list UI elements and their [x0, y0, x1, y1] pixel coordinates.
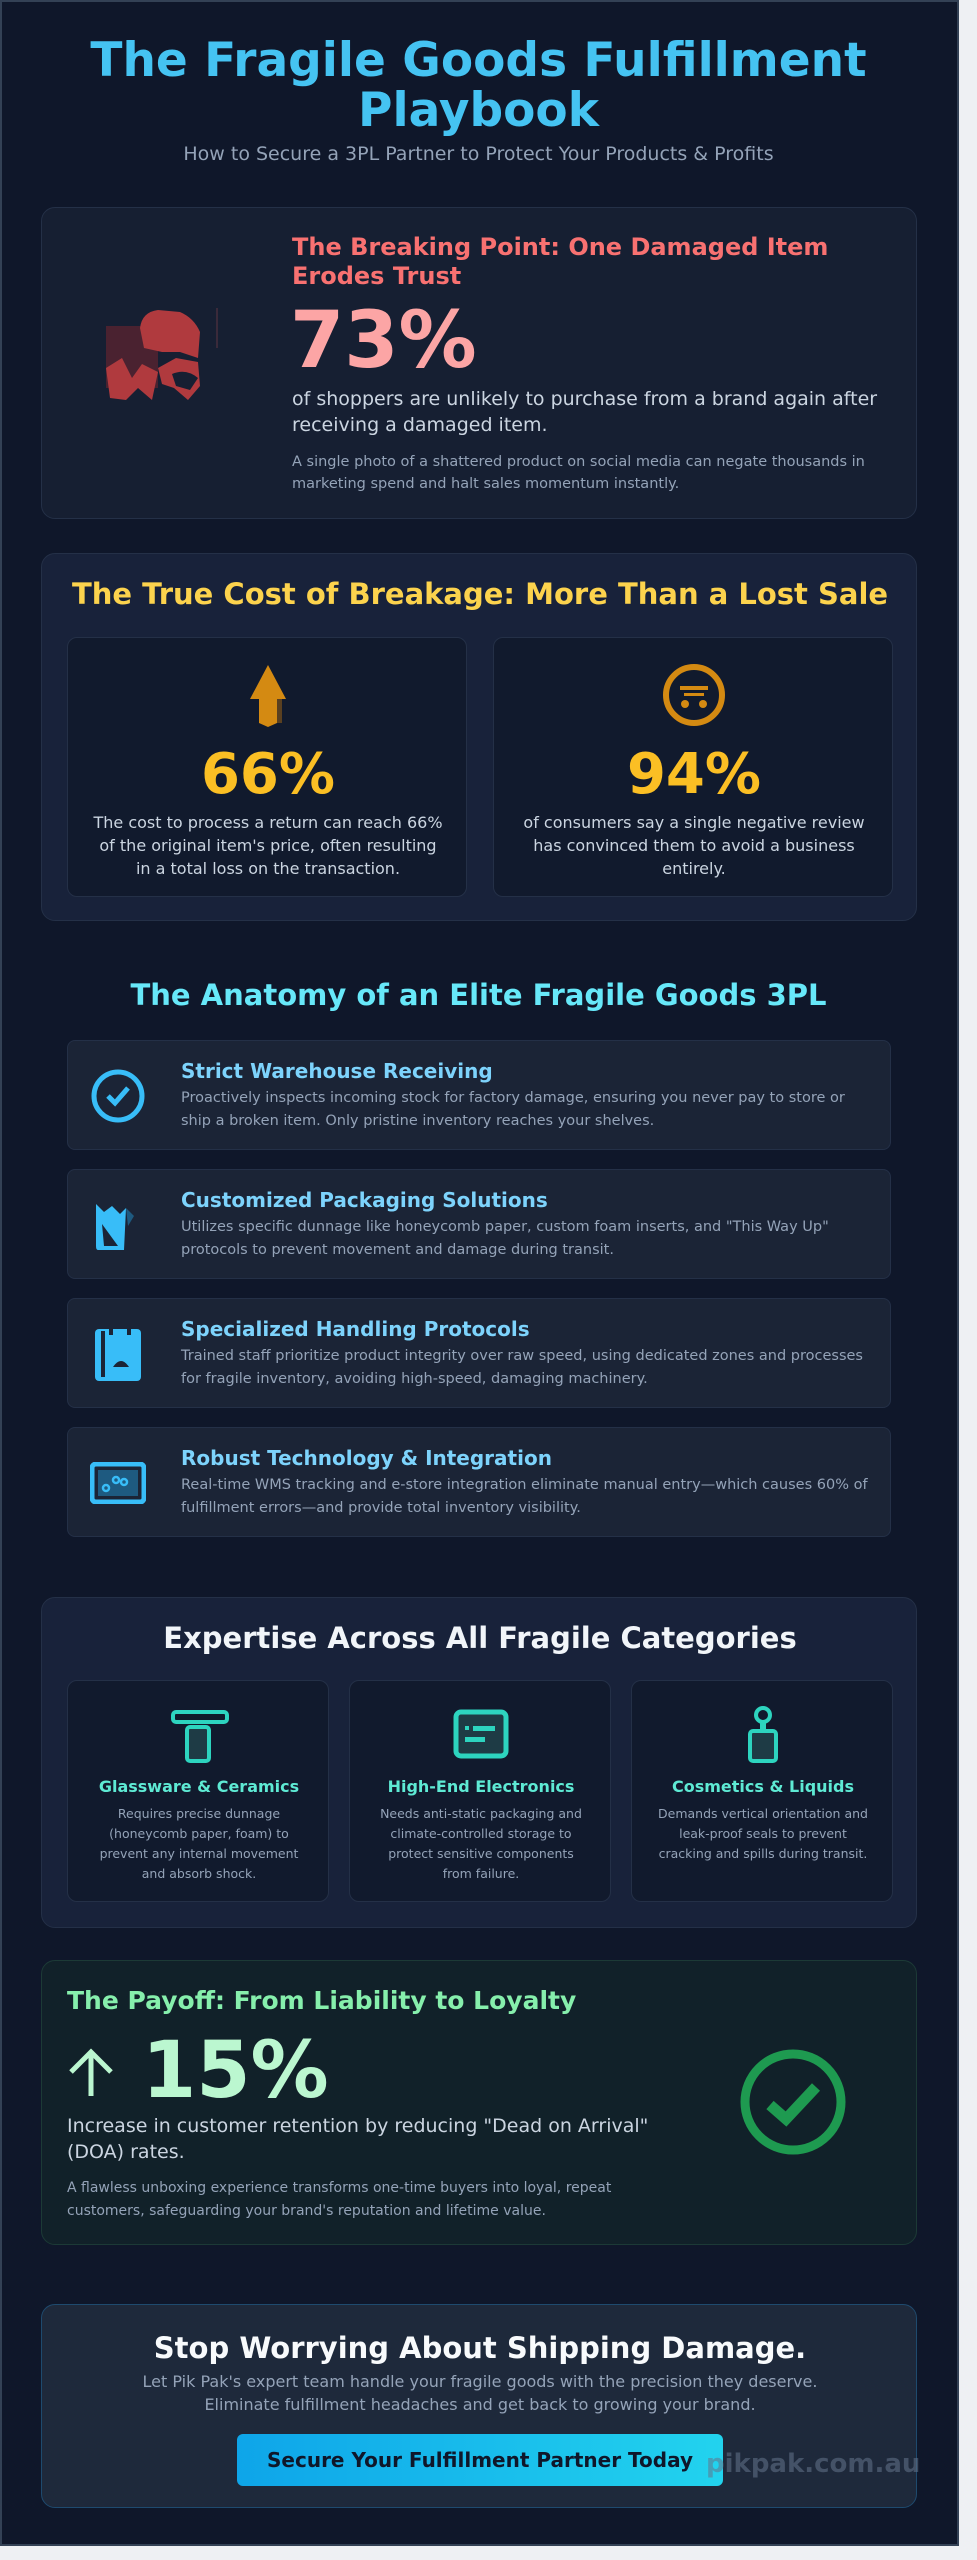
small text: A single photo of a shattered product on social media can negate thousands in marketing spend and halt sales momentum instantly.	[292, 454, 865, 492]
icon: up arrow	[69, 2048, 113, 2096]
feature: packaging	[67, 1169, 891, 1279]
body text: of shoppers are unlikely to purchase from a brand again after receiving a damaged item.	[292, 388, 877, 436]
heading: Stop Worrying About Shipping Damage.	[154, 2331, 806, 2365]
title: High-End Electronics	[388, 1777, 574, 1796]
feature: strict receiving	[67, 1040, 891, 1150]
icon: tech panel	[90, 1462, 146, 1504]
title: Strict Warehouse Receiving	[181, 1059, 493, 1083]
heading: anatomy: The Anatomy of an Elite Fragile Goods 3PL	[130, 978, 827, 1012]
heading: The True Cost of Breakage: More Than a Lost Sale	[72, 577, 888, 611]
panel: payoff	[41, 1960, 917, 2245]
title: Specialized Handling Protocols	[181, 1317, 530, 1341]
text: of consumers say a single negative review has convinced them to avoid a business entirely.	[523, 813, 865, 878]
title: Robust Technology & Integration	[181, 1446, 552, 1470]
title: Glassware & Ceramics	[99, 1777, 299, 1796]
icon: glass	[171, 1710, 229, 1763]
panel: breaking point	[41, 207, 917, 519]
icon: check circle	[92, 1070, 144, 1122]
number: 66%	[201, 742, 335, 807]
feature: handling	[67, 1298, 891, 1408]
small text: A flawless unboxing experience transforms one-time buyers into loyal, repeat customers, safeguarding your brand's reputation and lifetime value.	[67, 2180, 611, 2219]
icon: package	[96, 1204, 134, 1250]
category: cosmetics	[631, 1680, 893, 1902]
stat 73%: 73%	[290, 296, 477, 386]
panel: expertise	[41, 1597, 917, 1928]
desc: Needs anti-static packaging and climate-controlled storage to protect sensitive components from failure.	[380, 1806, 582, 1881]
desc: Utilizes specific dunnage like honeycomb paper, custom foam inserts, and "This Way Up" protocols to prevent movement and damage during transit.	[181, 1219, 829, 1258]
button	[237, 2434, 723, 2486]
icon: handbook	[95, 1329, 141, 1381]
stat 15%	[69, 2026, 329, 2116]
stat card 66%	[67, 637, 467, 897]
icon: bottle	[748, 1706, 778, 1763]
desc: Real-time WMS tracking and e-store integration eliminate manual entry—which causes 60% of fulfillment errors—and provide total inventory visibility.	[181, 1477, 868, 1516]
stat card 94%	[493, 637, 893, 897]
title: The Fragile Goods Fulfillment Playbook	[90, 33, 867, 138]
icon: broken item	[106, 308, 218, 400]
heading: The Payoff: From Liability to Loyalty	[67, 1986, 576, 2015]
icon: negative face	[663, 664, 725, 726]
heading: Expertise Across All Fragile Categories	[163, 1621, 797, 1655]
category: glassware	[67, 1680, 329, 1902]
desc: Trained staff prioritize product integrity over raw speed, using dedicated zones and processes for fragile inventory, avoiding high-speed, damaging machinery.	[181, 1348, 863, 1387]
icon: check circle	[740, 2050, 846, 2154]
category: electronics	[349, 1680, 611, 1902]
text: The cost to process a return can reach 66% of the original item's price, often resulting in a total loss on the transaction.	[93, 813, 443, 878]
desc: Demands vertical orientation and leak-proof seals to prevent cracking and spills during transit.	[658, 1806, 868, 1861]
subtitle: How to Secure a 3PL Partner to Protect Your Products & Profits	[183, 143, 774, 165]
panel: true cost	[41, 553, 917, 921]
heading: The Breaking Point: One Damaged Item Erodes Trust	[292, 233, 828, 290]
number: 94%	[627, 742, 761, 807]
button: Secure Your Fulfillment Partner Today	[267, 2448, 693, 2472]
subtext: Let Pik Pak's expert team handle your fragile goods with the precision they deserve. Eliminate fulfillment headaches and get back to growing your brand.	[143, 2372, 817, 2414]
icon: up arrow	[250, 665, 286, 727]
watermark: pikpak.com.au	[706, 2449, 920, 2479]
desc: Proactively inspects incoming stock for factory damage, ensuring you never pay to store or ship a broken item. Only pristine inventory reaches your shelves.	[181, 1090, 845, 1129]
icon: device	[454, 1710, 508, 1758]
title: Customized Packaging Solutions	[181, 1188, 548, 1212]
panel: call to action	[41, 2304, 917, 2508]
feature: technology	[67, 1427, 891, 1537]
body text: Increase in customer retention by reducing "Dead on Arrival" (DOA) rates.	[67, 2115, 648, 2163]
desc: Requires precise dunnage (honeycomb paper, foam) to prevent any internal movement and absorb shock.	[100, 1806, 298, 1881]
number: 15%	[142, 2026, 329, 2116]
title: Cosmetics & Liquids	[672, 1777, 854, 1796]
